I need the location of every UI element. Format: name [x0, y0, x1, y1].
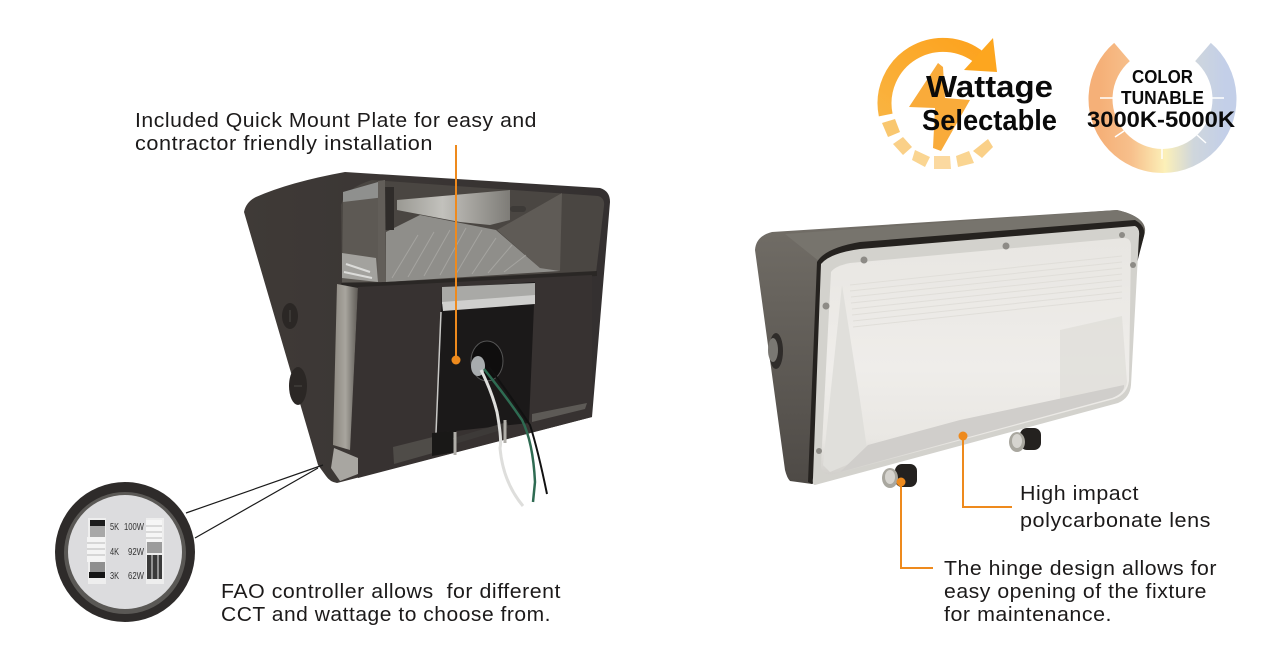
switch labels: 100W [124, 522, 144, 533]
text: lens: High impact [1020, 483, 1139, 505]
corner tab [331, 448, 358, 481]
heat sink ribs [392, 228, 526, 278]
badge: color tunable: TUNABLE [1121, 88, 1204, 108]
hinge right [1009, 428, 1041, 452]
housing [755, 210, 1145, 484]
lower left interior [333, 284, 358, 450]
badge: color tunable: 3000K-5000K [1087, 107, 1235, 132]
dashed segments [882, 119, 993, 169]
fixture housing [244, 172, 610, 483]
text: hinge: for maintenance. [944, 604, 1112, 626]
lens [821, 238, 1131, 475]
inset: FAO controller [55, 482, 195, 622]
screw [510, 206, 526, 212]
CCT switch [87, 518, 106, 584]
top face [785, 210, 1142, 262]
shiny corner [342, 253, 378, 282]
back plate [350, 275, 592, 478]
left bay [342, 195, 378, 282]
wires [481, 370, 523, 506]
wattage switch [146, 518, 164, 584]
conduit hole [471, 341, 503, 381]
switch labels: 5K [110, 522, 119, 533]
text: lens: polycarbonate lens [1020, 510, 1211, 532]
badge: wattage selectable [882, 38, 1057, 169]
hinge left [882, 464, 917, 488]
text: hinge [944, 558, 1217, 626]
lens right facets [1060, 316, 1127, 412]
badge text: COLOR [1132, 67, 1193, 87]
switch labels: 4K [110, 547, 119, 558]
left fixture: rear view [244, 172, 610, 506]
reflector plate [386, 215, 560, 282]
upper cavity [341, 180, 604, 285]
badge: wattage selectable: Selectable [922, 105, 1057, 137]
dark bracket [385, 187, 394, 230]
badge: color tunable [1087, 52, 1235, 161]
zoom leader lines [186, 465, 323, 538]
arrow ring [885, 38, 997, 115]
mount plate [437, 282, 535, 433]
right wall [497, 193, 562, 271]
left bay top [343, 180, 385, 202]
bottom latch [432, 431, 456, 456]
bushing [471, 356, 485, 376]
lens bottom band [840, 385, 1124, 472]
lens frame [813, 226, 1139, 485]
dark gasket [808, 220, 1144, 484]
right fixture: front view [755, 210, 1145, 488]
driver bracket [397, 190, 510, 225]
text: lens [1020, 483, 1211, 532]
bottom slot [393, 437, 433, 464]
text: FAO controller [221, 581, 561, 626]
callout leader: hinge [896, 478, 933, 568]
text: hinge: easy opening of the fixture [944, 581, 1207, 603]
switch labels: 3K [110, 571, 119, 582]
side knockout [769, 333, 783, 369]
inset ring [55, 482, 195, 622]
lens left facet [823, 285, 868, 472]
lens ribs [850, 256, 1122, 327]
gradient ring [1100, 52, 1224, 161]
knockouts [282, 303, 298, 329]
ledge [341, 271, 597, 288]
switch labels: 62W [128, 571, 144, 582]
lightning bolt [909, 63, 970, 151]
badge text: Wattage [926, 69, 1053, 104]
callout leader: mount plate [452, 145, 460, 364]
text: mount plate [135, 110, 537, 155]
switch labels [110, 522, 144, 582]
text: hinge: The hinge design allows for [944, 558, 1217, 580]
left bracket [378, 180, 386, 282]
text: mount plate: contractor friendly installation [135, 133, 433, 155]
switch labels: 92W [128, 547, 144, 558]
callout leader: lens [958, 432, 1012, 507]
frame screws [860, 256, 868, 264]
text: mount plate: Included Quick Mount Plate for easy and [135, 110, 537, 132]
text: FAO controller: CCT and wattage to choose from. [221, 604, 551, 626]
ring ticks [1100, 98, 1224, 159]
text: FAO controller: FAO controller allows for different [221, 581, 561, 603]
